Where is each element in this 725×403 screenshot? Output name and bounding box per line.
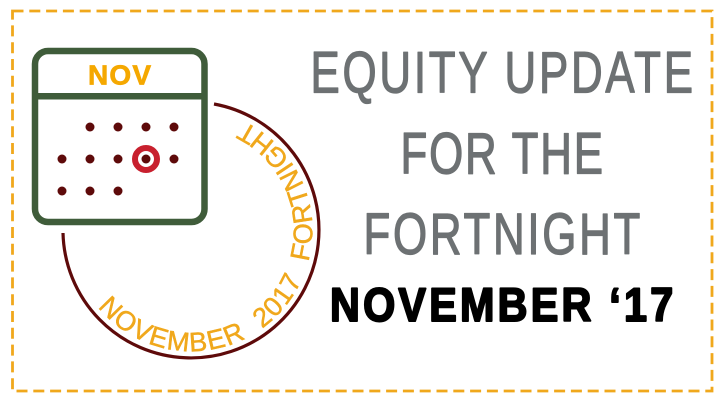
calendar outline [35,51,204,222]
curved date label: NOVEMBER 2017 FORTNIGHT [98,124,313,352]
title: equity update for the fortnight [310,39,693,266]
maroon arc [63,104,319,358]
title line 2: FOR THE [400,120,603,186]
calendar date dots [58,122,178,196]
title line 1: EQUITY UPDATE [310,39,693,105]
calendar header divider [35,93,205,100]
title line 3: FORTNIGHT [364,201,640,266]
calendar month label: NOV [88,60,151,90]
highlighted date ring [135,148,157,170]
subtitle: november '17: NOVEMBER ‘17 [330,280,673,332]
fortnight circular badge [61,102,321,360]
icon: calendar [35,51,205,222]
